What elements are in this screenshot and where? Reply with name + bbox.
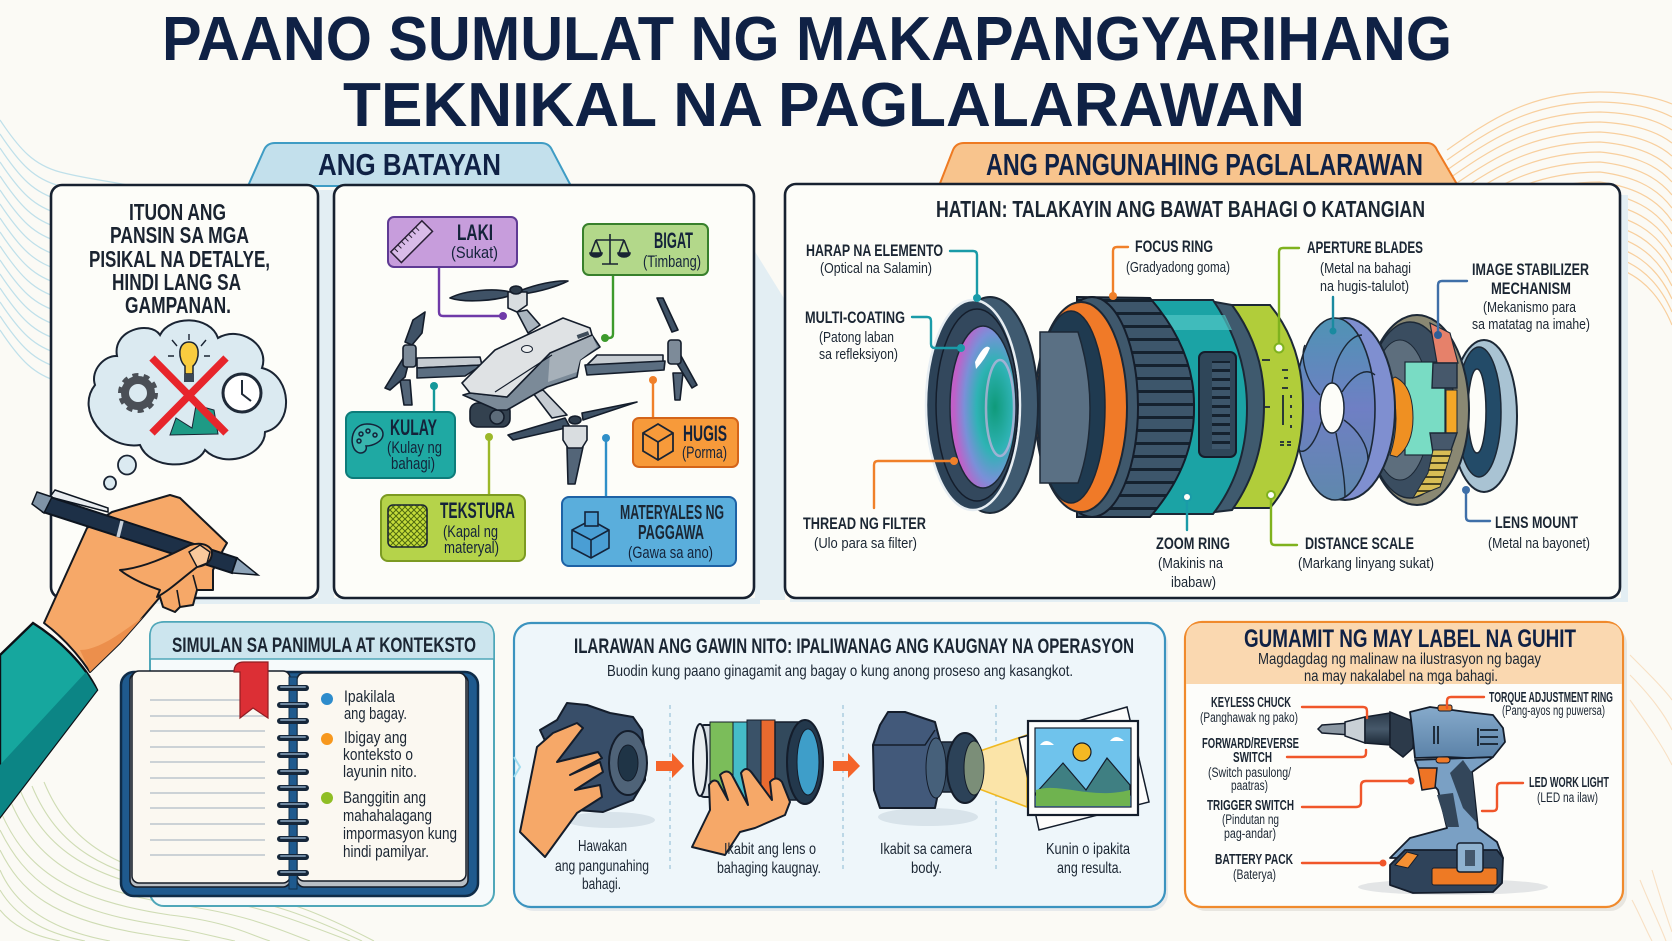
zoom window [1199,352,1236,457]
heading text: PISIKAL NA DETALYE, [89,246,270,272]
motor housing [1410,707,1505,758]
trigger [1418,768,1437,790]
dark ring [1215,302,1264,512]
connector: focus ring [1109,247,1128,300]
label: image stabilizer: (Mekanismo para [1483,299,1577,316]
label: bigat: BIGAT [654,228,693,253]
label: materyales: PAGGAWA [638,522,704,544]
label: multi-coating: sa refleksiyon) [819,346,898,363]
caption: step 3: body. [911,860,942,877]
connector: aperture [1274,248,1336,352]
lower body [463,335,600,410]
connector: harap [950,251,981,302]
title: PAANO SUMULAT NG MAKAPANGYARIHANG [162,5,1452,74]
label: focus ring: FOCUS RING [1135,237,1213,256]
label: bigat: (Timbang) [643,252,701,271]
label: zoom ring [1156,534,1230,591]
step 3: camera with lens and beam [873,712,1027,826]
connector: trigger [1302,778,1414,807]
subheading [1258,651,1541,685]
background waves: top right [1447,92,1672,325]
label: keyless chuck [1200,695,1298,725]
bullet list: mahahalagang [343,806,432,825]
connector: kulay [430,382,438,412]
title [162,5,1452,140]
label: bigat [583,224,708,275]
label: harap na elemento [806,241,943,277]
icon: thought cloud [89,320,286,490]
label: trigger switch: (Pindutan ng [1222,812,1279,827]
stabilizer [1365,315,1469,505]
heading: HATIAN: TALAKAYIN ANG BAWAT BAHAGI O KATANGIAN [936,196,1425,222]
label: hugis: (Porma) [682,443,727,462]
distance scale ring [1230,305,1303,508]
label: image stabilizer: IMAGE STABILIZER [1472,260,1589,279]
label: aperture blades [1307,238,1423,295]
bullet list: layunin nito. [343,762,417,781]
icon: red cross [152,358,226,433]
connector: led [1482,783,1523,811]
label: multi-coating: MULTI-COATING [805,308,905,327]
label: lens mount: (Metal na bayonet) [1488,535,1590,552]
front ring [926,297,1038,513]
lens mount [1451,340,1517,492]
icon: ruler [391,221,433,263]
connector: zoom ring [1183,493,1191,530]
heading text [89,199,270,318]
label: materyales [562,497,736,566]
label: multi-coating: (Patong laban [819,329,894,346]
bookmark [234,662,268,718]
panel: describe the operation [514,623,1168,911]
background waves: bottom left [0,782,374,941]
connector: keyless chuck [1302,707,1367,718]
caption: step 3 [880,841,972,877]
connector: bigat [601,275,613,342]
label: forward/reverse: (Switch pasulong/ [1208,765,1291,780]
label: thread ng filter: (Ulo para sa filter) [814,535,917,552]
label: zoom ring: ibabaw) [1171,574,1216,591]
panel: drone attributes [334,185,754,598]
label: materyales: (Gawa sa ano) [628,543,713,562]
background waves: bottom right [1630,655,1672,941]
icon: partially hidden tool [170,405,218,435]
heading text: GAMPANAN. [125,292,231,318]
propeller blades [385,281,697,440]
subheading: Buodin kung paano ginagamit ang bagay o kung anong proseso ang kasangkot. [607,663,1073,680]
zoom ring [1150,300,1247,514]
bottom arm [533,390,567,418]
top arm [517,310,540,333]
connector: materyales [602,434,610,497]
label: kulay: KULAY [390,415,437,440]
focus ring [1046,297,1194,517]
top shell [462,318,592,397]
heading: GUMAMIT NG MAY LABEL NA GUHIT [1244,625,1576,653]
icon: gear [120,375,156,411]
bullet list: ang bagay. [344,704,407,723]
panel shadows [60,190,1628,604]
bullet list: Banggitin ang [343,788,426,807]
label: image stabilizer: sa matatag na imahe) [1472,316,1590,333]
caption: step 2: Ikabit ang lens o [724,841,816,858]
thumb [120,544,212,597]
label: thread ng filter: THREAD NG FILTER [803,514,926,533]
panel: focus on physical details [51,185,318,598]
caption: step 4: ang resulta. [1057,860,1122,877]
label: kulay: bahagi) [391,454,435,473]
label: distance scale: (Markang linyang sukat) [1298,555,1434,572]
subheading: Magdagdag ng malinaw na ilustrasyon ng bagay [1258,651,1541,668]
arrow 2 [833,753,860,778]
icon: palette [352,424,383,453]
panel: lens breakdown [785,184,1620,598]
illustration: exploded lens [926,297,1517,517]
label: tekstura: (Kapal ng [443,522,498,541]
label: torque ring: (Pang-ayos ng puwersa) [1502,703,1605,718]
gimbal camera [470,403,510,427]
label: trigger switch: TRIGGER SWITCH [1207,798,1294,814]
icon: texture swatch [388,505,427,547]
label: trigger switch [1207,798,1294,841]
label: hugis [633,418,738,467]
caption: step 3: Ikabit sa camera [880,841,972,858]
label: hugis: HUGIS [683,421,727,446]
caption: step 1: bahagi. [582,876,621,893]
label: focus ring: (Gradyadong goma) [1126,259,1230,276]
subheading: na may nakalabel na mga bahagi. [1304,668,1498,685]
caption: step 1 [555,838,649,893]
label: harap na elemento: HARAP NA ELEMENTO [806,241,943,260]
label: distance scale: DISTANCE SCALE [1305,534,1414,553]
step 2: hand holding lens [692,720,823,855]
label: battery pack: (Baterya) [1233,867,1276,882]
step 4: photo result [1019,707,1149,830]
caption: step 2 [717,841,821,877]
bit [1318,723,1350,735]
illustration: spiral notebook [121,662,478,896]
label: image stabilizer: MECHANISM [1491,279,1571,298]
icon: scale [590,234,630,264]
heading: SIMULAN SA PANIMULA AT KONTEKSTO [172,634,476,657]
section tab: Ang Pangunahing Paglalarawan [939,143,1458,186]
step 1: hand holding camera [520,703,655,857]
arrow 1 [656,753,684,778]
heading text: ITUON ANG [129,199,226,225]
connector: multi-coating [912,317,965,352]
label: keyless chuck: KEYLESS CHUCK [1211,695,1291,711]
label: battery pack: BATTERY PACK [1215,852,1293,868]
connector: laki [439,267,507,320]
aperture blades [1295,318,1395,500]
chuck nose [1345,717,1365,743]
label: forward/reverse: paatras) [1231,778,1268,793]
label: led work light: (LED na ilaw) [1537,790,1598,805]
background waves: top left [0,120,150,400]
connector: forward/reverse [1287,750,1366,757]
label: image stabilizer [1472,260,1590,333]
bullet list: konteksto o [343,745,413,764]
bullet list [321,687,457,861]
heading text: PANSIN SA MGA [110,222,249,248]
section tab: Ang Pangunahing Paglalarawan: ANG PANGUNAHING PAGLALARAWAN [986,147,1423,182]
label: aperture blades: (Metal na bahagi [1320,260,1411,277]
left arm [417,357,482,378]
label: thread ng filter [803,514,926,552]
label: tekstura: TEKSTURA [440,498,515,523]
label: aperture blades: APERTURE BLADES [1307,238,1423,257]
right arm [585,355,665,375]
label: laki [388,217,517,267]
title: TEKNIKAL NA PAGLALARAWAN [343,71,1305,140]
icon: blocks [572,512,609,558]
label: tekstura: materyal) [444,538,499,557]
battery [1390,850,1503,893]
heading text: HINDI LANG SA [112,269,241,295]
icon: clock [223,374,261,412]
label: led work light: LED WORK LIGHT [1529,775,1609,791]
caption: step 2: bahaging kaugnay. [717,860,821,877]
connector: hugis [649,376,657,418]
icon: cube [643,424,673,460]
panel: labeled diagram [1185,622,1627,911]
label: multi-coating [805,308,905,363]
orange ring [1035,302,1127,512]
label: laki: (Sukat) [451,243,498,262]
caption: step 4 [1046,841,1130,877]
label: distance scale [1298,534,1434,572]
hand [44,495,227,672]
label: lens mount [1488,513,1590,552]
handle and battery top [1390,757,1503,858]
connector: distance scale [1267,491,1297,545]
label: keyless chuck: (Panghawak ng pako) [1200,710,1298,725]
label: lens mount: LENS MOUNT [1495,513,1578,532]
caption: step 1: Hawakan [578,838,627,855]
bullet list: Ibigay ang [344,728,407,747]
connector: battery [1302,860,1386,866]
spiral rings [280,687,306,873]
bullet list: Ipakilala [344,687,395,706]
motors [403,286,681,448]
heading: ILARAWAN ANG GAWIN NITO: IPALIWANAG ANG KAUGNAY NA OPERASYON [574,635,1134,658]
label: led work light [1529,775,1609,805]
label: zoom ring: ZOOM RING [1156,534,1230,553]
icon: light bulb [168,334,210,382]
label: battery pack [1215,852,1293,882]
label: harap na elemento: (Optical na Salamin) [820,260,932,277]
front glass [950,326,1016,488]
illustration: hand holding pen [0,490,258,817]
caption: step 4: Kunin o ipakita [1046,841,1130,858]
label: materyales: MATERYALES NG [620,502,724,524]
label: forward/reverse [1202,736,1299,793]
label: laki: LAKI [457,220,493,245]
label: kulay [346,412,455,478]
section tab: Ang Batayan [248,143,571,186]
pen [32,490,258,575]
label: forward/reverse: FORWARD/REVERSE [1202,736,1299,752]
illustration: cordless drill [1318,705,1548,895]
label: kulay: (Kulay ng [387,438,442,457]
connector: stabilizer [1434,281,1467,339]
section tab: Ang Batayan: ANG BATAYAN [318,147,501,182]
legs [400,373,683,484]
connector: torque [1447,697,1484,708]
label: zoom ring: (Makinis na [1158,555,1224,572]
connector: thread [874,457,958,508]
chuck [1365,713,1390,745]
label: tekstura [381,495,525,561]
connector: lens mount [1462,486,1490,521]
bullet list: impormasyon kung [343,824,457,843]
caption: step 1: ang pangunahing [555,858,649,875]
panel: introduction and context [121,622,494,906]
illustration: drone [385,281,697,484]
label: forward/reverse: SWITCH [1233,750,1272,766]
label: aperture blades: na hugis-talulot) [1320,278,1409,295]
connector: tekstura [485,433,493,495]
sleeve [0,623,97,817]
label: trigger switch: pag-andar) [1224,826,1276,841]
bullet list: hindi pamilyar. [343,842,429,861]
label: torque ring [1489,690,1613,718]
label: focus ring [1126,237,1230,276]
